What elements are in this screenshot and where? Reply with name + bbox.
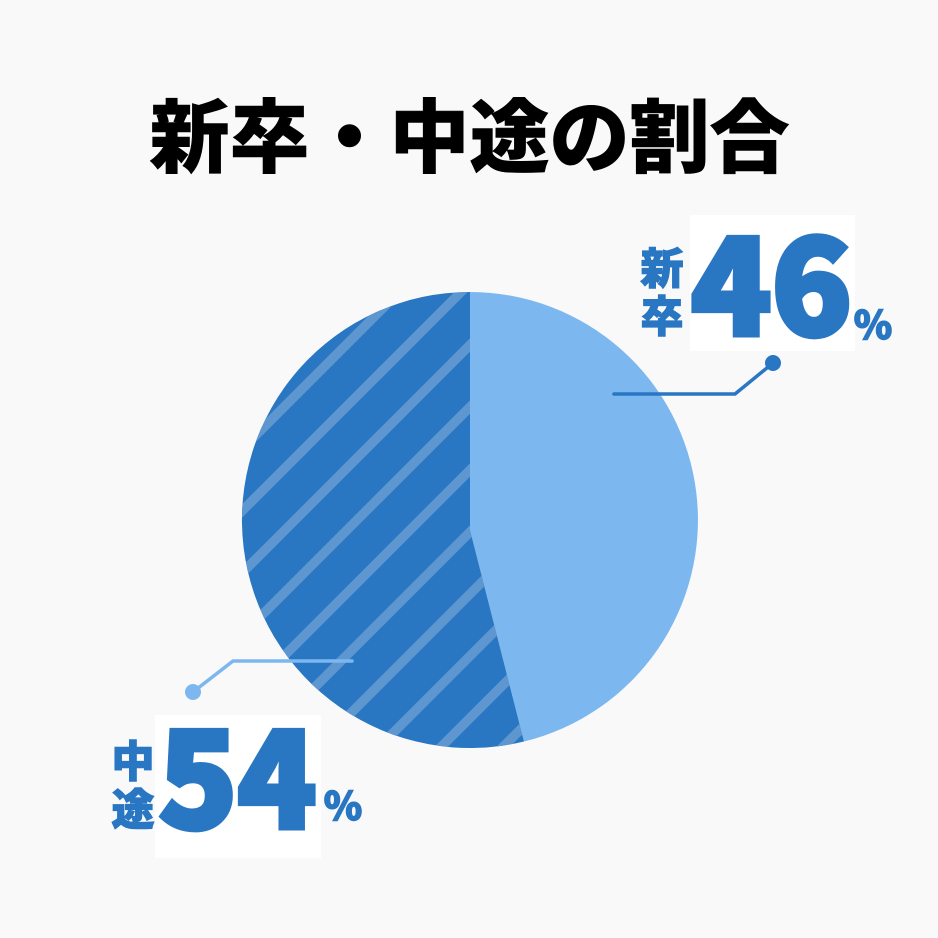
label: 中途 54% (112, 661, 362, 866)
label text 中途 (112, 728, 154, 838)
white box behind 46 (690, 215, 855, 351)
leader line and dot (185, 661, 352, 700)
label text 新卒: 新 (640, 235, 684, 297)
pie slice: 中途 54% (242, 292, 524, 748)
percent sign: % (324, 776, 362, 832)
label text 新卒 (640, 235, 684, 345)
percent sign: % (854, 295, 892, 351)
title: 新卒・中途の割合 (150, 74, 790, 190)
leader line and dot (614, 355, 781, 394)
pie chart (242, 292, 698, 748)
label text 中途: 中 (112, 728, 154, 790)
value 46: 46 (691, 183, 852, 373)
white box behind 54 (155, 715, 321, 858)
label text 中途: 途 (112, 776, 154, 838)
label: 新卒 46% (614, 183, 892, 394)
value 54: 54 (158, 676, 316, 866)
label text 新卒: 卒 (640, 283, 684, 345)
pie slice: 新卒 46% (470, 292, 698, 742)
